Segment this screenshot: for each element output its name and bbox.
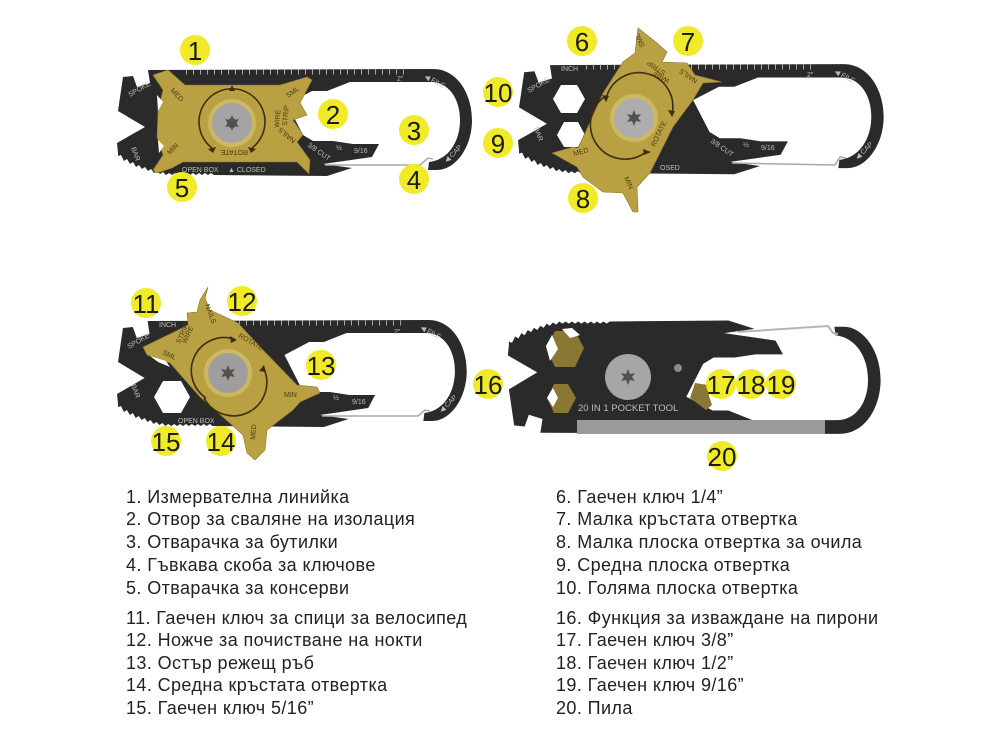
panel: tool view D (tools 16-20, reverse side) bbox=[508, 320, 881, 434]
tool markings A: 9/16 bbox=[354, 148, 368, 155]
tool markings C: SPOKE bbox=[126, 332, 151, 351]
carabiner wire gate A bbox=[325, 158, 433, 165]
tool markings C: OPEN BOX bbox=[178, 418, 215, 425]
plate markings B: MED bbox=[573, 147, 590, 158]
plate markings C: ROTATE bbox=[237, 333, 264, 353]
tool markings C bbox=[126, 322, 459, 425]
number badges: 12 bbox=[228, 287, 256, 317]
product label D: 20 IN 1 POCKET TOOL bbox=[578, 403, 678, 414]
plate markings C: NAILS bbox=[203, 303, 217, 325]
legend list: items 11-15: 15. Гаечен ключ 5/16” bbox=[126, 698, 314, 718]
plate markings C: WIRE bbox=[181, 325, 196, 345]
tool markings C: ◀ FILE bbox=[419, 325, 442, 341]
legend list: items 16-20: 16. Функция за изваждане на пирони bbox=[556, 608, 878, 628]
number badges: 19 bbox=[767, 370, 795, 400]
legend list: items 6-10: 6. Гаечен ключ 1/4” bbox=[556, 487, 723, 507]
tool markings C: BAR bbox=[129, 383, 141, 399]
legend list: items 16-20: 18. Гаечен ключ 1/2” bbox=[556, 653, 734, 673]
legend list: items 11-15: 11. Гаечен ключ за спици за велосипед bbox=[126, 608, 467, 628]
rotate arrow C bbox=[191, 336, 267, 416]
rotate arrow A bbox=[199, 85, 265, 153]
tool markings C: ½ bbox=[333, 394, 339, 402]
hex hole C bbox=[154, 381, 190, 413]
number badges: 11 bbox=[132, 289, 160, 319]
panel: tool view B (tools 6-10) bbox=[518, 28, 884, 212]
number badges: 1 bbox=[188, 36, 202, 66]
tool markings C: 9/16 bbox=[352, 399, 366, 406]
panel: tool view A (tools 1-5) bbox=[117, 69, 472, 176]
tool markings A: ◀ CAP bbox=[443, 144, 464, 164]
tool markings A: BAR bbox=[129, 146, 141, 162]
legend list: items 16-20: 19. Гаечен ключ 9/16” bbox=[556, 675, 744, 695]
tool markings C: INCH bbox=[159, 322, 176, 329]
tool markings A bbox=[128, 74, 464, 174]
tool markings B: BAR bbox=[532, 126, 544, 142]
plate markings C: MIN bbox=[284, 392, 297, 399]
plate markings C: SML bbox=[161, 349, 177, 362]
tool body C bbox=[117, 320, 467, 427]
screw C bbox=[204, 349, 252, 397]
plate sliver C bbox=[150, 356, 170, 367]
legend list: items 16-20 bbox=[556, 608, 878, 718]
legend list: items 1-5: 4. Гъвкава скоба за ключове bbox=[126, 555, 376, 575]
tool markings B bbox=[526, 66, 875, 172]
legend list: items 11-15: 14. Средна кръстата отвертка bbox=[126, 675, 388, 695]
plate markings C bbox=[161, 303, 297, 440]
legend list: items 16-20: 20. Пила bbox=[556, 698, 633, 718]
tool markings B: INCH bbox=[561, 66, 578, 73]
tool body A bbox=[117, 69, 472, 176]
number badges: 15 bbox=[152, 427, 180, 457]
rotate arrow B bbox=[590, 73, 675, 159]
tool markings A: OPEN BOX bbox=[182, 167, 219, 174]
gold driver plate A bbox=[153, 70, 312, 174]
tool markings B: 2" bbox=[807, 72, 814, 79]
gold driver plate C bbox=[143, 287, 320, 460]
number badges: 14 bbox=[207, 427, 235, 457]
number badges: 18 bbox=[737, 370, 765, 400]
legend list: items 1-5 bbox=[126, 487, 415, 598]
number badges: 7 bbox=[681, 27, 695, 57]
plate markings A: ROTATE bbox=[220, 148, 248, 155]
legend list: items 1-5: 3. Отварачка за бутилки bbox=[126, 532, 338, 552]
tool markings B: SPOKE bbox=[526, 76, 551, 95]
plate markings B: WIRE bbox=[652, 68, 671, 84]
legend list: items 1-5: 1. Измервателна линийка bbox=[126, 487, 350, 507]
tool markings A: ◀ FILE bbox=[423, 74, 446, 90]
legend list: items 16-20: 17. Гаечен ключ 3/8” bbox=[556, 630, 734, 650]
legend list: items 6-10: 9. Средна плоска отвертка bbox=[556, 555, 790, 575]
number badges: 6 bbox=[575, 27, 589, 57]
number badges: 5 bbox=[175, 173, 189, 203]
plate markings B: MIN bbox=[622, 176, 634, 190]
plate markings B: SML bbox=[634, 32, 647, 48]
number badges: 17 bbox=[707, 370, 735, 400]
screw D bbox=[605, 354, 651, 400]
tool markings B: OSED bbox=[660, 165, 680, 172]
legend list: items 1-5: 5. Отварачка за консерви bbox=[126, 578, 349, 598]
carabiner wire gate C bbox=[322, 410, 430, 416]
number badges: 2 bbox=[326, 100, 340, 130]
tool markings A: ½ bbox=[336, 144, 342, 152]
tool body B bbox=[518, 64, 884, 174]
tool markings A: SPOKE bbox=[128, 80, 152, 99]
carabiner wire gate B bbox=[732, 157, 846, 165]
number badges: 10 bbox=[484, 78, 512, 108]
tool markings A: 3/8 CUT bbox=[306, 142, 332, 163]
legend list: items 11-15 bbox=[126, 608, 467, 718]
tool markings B: ◀ FILE bbox=[833, 69, 856, 85]
saw blade D bbox=[577, 420, 825, 434]
pivot pin D bbox=[674, 364, 682, 372]
tool markings C: 2" bbox=[394, 329, 401, 336]
carabiner wire gate D bbox=[738, 326, 838, 334]
number badges: 13 bbox=[307, 351, 335, 381]
legend list: items 1-5: 2. Отвор за сваляне на изолация bbox=[126, 509, 415, 529]
legend list: items 6-10: 7. Малка кръстата отвертка bbox=[556, 509, 798, 529]
tool markings B: ½ bbox=[743, 141, 749, 149]
tool markings A: ▲ CLOSED bbox=[228, 167, 266, 174]
tool markings C: ◀ CAP bbox=[438, 394, 459, 414]
tool markings B: 9/16 bbox=[761, 145, 775, 152]
legend list: items 6-10: 8. Малка плоска отвертка за очила bbox=[556, 532, 862, 552]
ruler ticks C bbox=[232, 320, 403, 326]
screw B bbox=[610, 94, 658, 142]
plate markings C: MED bbox=[250, 424, 258, 440]
plate markings A: STRIP bbox=[282, 105, 291, 126]
number badges: 3 bbox=[407, 116, 421, 146]
plate slivers A bbox=[157, 95, 164, 153]
gold hex insets D bbox=[546, 328, 712, 413]
legend list: items 6-10: 10. Голяма плоска отвертка bbox=[556, 578, 798, 598]
plate markings B: ROTATE bbox=[650, 120, 669, 148]
screw A bbox=[208, 99, 256, 147]
plate markings B: NAILS bbox=[678, 67, 699, 84]
tool markings B: ◀ CAP bbox=[854, 141, 875, 161]
ruler ticks A bbox=[186, 70, 405, 74]
ruler ticks B bbox=[586, 64, 815, 70]
plate markings A: NAILS bbox=[277, 125, 297, 144]
plate markings A: WIRE bbox=[274, 109, 283, 128]
plate markings A: SML bbox=[285, 86, 301, 100]
gold driver plate B bbox=[552, 28, 722, 212]
plate markings A bbox=[166, 86, 301, 156]
tool markings B: 3/8 CUT bbox=[709, 138, 735, 159]
hex holes B bbox=[553, 85, 585, 147]
number badges bbox=[131, 26, 796, 472]
panel: tool view C (tools 11-15) bbox=[117, 287, 467, 460]
plate markings C: STRIP bbox=[175, 323, 191, 345]
number badges: 16 bbox=[474, 370, 502, 400]
legend list: items 6-10 bbox=[556, 487, 862, 598]
tool body D bbox=[508, 320, 881, 434]
number badges: 20 bbox=[708, 442, 736, 472]
number badges: 9 bbox=[491, 129, 505, 159]
legend list: items 11-15: 13. Остър режещ ръб bbox=[126, 653, 314, 673]
plate markings A: MED bbox=[169, 87, 185, 103]
plate markings B bbox=[573, 32, 699, 190]
number badges: 8 bbox=[576, 184, 590, 214]
plate markings B: STRIP bbox=[646, 58, 667, 76]
plate markings A: MIN bbox=[166, 142, 180, 156]
number badges: 4 bbox=[407, 165, 421, 195]
tool markings A: 2" bbox=[397, 76, 404, 83]
legend list: items 11-15: 12. Ножче за почистване на нокти bbox=[126, 630, 423, 650]
